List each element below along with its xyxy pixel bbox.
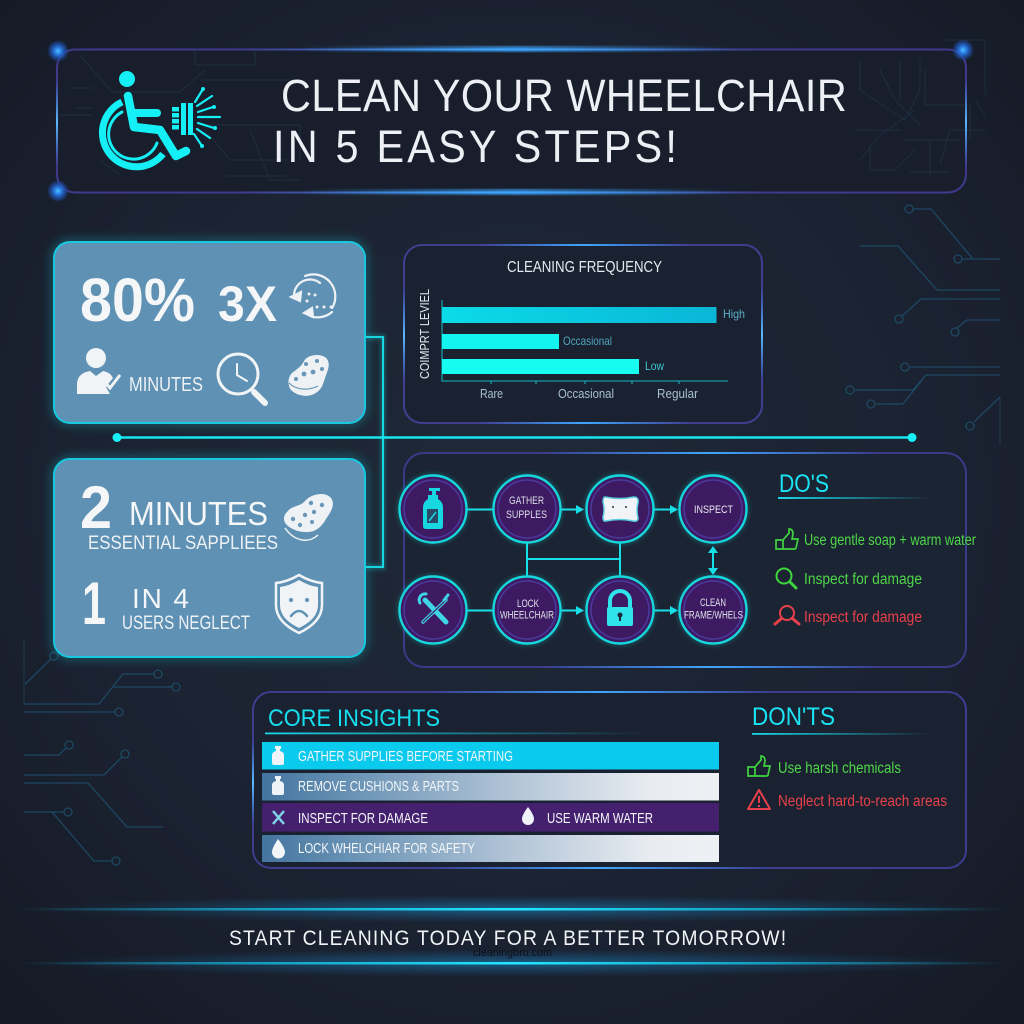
label: users neglect: USERS NEGLECT [122, 613, 250, 634]
heading: do's: DO'S [779, 470, 829, 498]
icon: wrench and screwdriver [419, 594, 448, 622]
do's list [775, 529, 976, 626]
stat: 1 in 4: 1 [82, 570, 106, 637]
insight bar 3 [262, 803, 719, 832]
icon: sponge [284, 494, 333, 540]
insight bar 1: GATHER SUPPLIES BEFORE STARTING [298, 749, 513, 765]
stat: 1 in 4 [82, 570, 189, 637]
step label: lock wheelchair: WHEELCHAIR [500, 610, 554, 622]
bar chart: Regular [657, 386, 699, 401]
panel: cleaning frequency chart [403, 244, 763, 424]
label: essential supplies: ESSENTIAL SAPPLIEES [88, 533, 278, 554]
icon: red magnifier [775, 606, 799, 624]
do: inspect: Inspect for damage [804, 571, 922, 588]
icon: sponge [288, 355, 329, 396]
panel: stats card bottom [54, 459, 365, 657]
icon: soap bottle [423, 488, 443, 529]
insight bar 3: INSPECT FOR DAMAGE [298, 811, 428, 827]
icon: refresh with particles [291, 274, 335, 317]
stat: 3X: 3X [218, 276, 277, 332]
panel: core insights [252, 691, 966, 869]
don'ts list [748, 756, 947, 810]
icon: green thumbs up [748, 756, 770, 776]
stat: 1 in 4: IN 4 [132, 583, 189, 614]
flow step circles [399, 475, 747, 644]
do: gentle soap: Use gentle soap + warm water [804, 532, 976, 549]
step label: inspect: INSPECT [694, 504, 733, 516]
icon: person with check [77, 348, 120, 394]
bar chart: Rare [480, 386, 503, 401]
icon: padlock [607, 591, 633, 626]
title: IN 5 EASY STEPS! [273, 122, 677, 172]
insight bar 1 [262, 742, 719, 770]
do: inspect red: Inspect for damage [804, 609, 922, 626]
icon: sad shield [276, 575, 322, 633]
step label: lock wheelchair: LOCK [517, 598, 539, 610]
icon: thumbs up [776, 529, 798, 549]
panel: stats card top [54, 242, 365, 423]
chart title: CLEANING FREQUENCY [507, 259, 662, 276]
bar chart [442, 300, 745, 401]
title [273, 71, 847, 172]
y axis label: COIMPRT LEVIEL [418, 289, 432, 379]
panel: process flow and do's [404, 452, 966, 668]
bar chart: Occasional [558, 386, 614, 401]
step label: gather supplies: SUPPLES [506, 509, 547, 521]
flow connectors and arrows [467, 505, 718, 615]
heading: don'ts: DON'TS [752, 703, 835, 731]
insight bar 4: LOCK WHELCHIAR FOR SAFETY [298, 841, 475, 857]
bar chart: High [723, 307, 745, 321]
icon: clock magnifier [218, 354, 265, 403]
glowing corner nodes [47, 39, 974, 202]
insight bar 2: REMOVE CUSHIONS & PARTS [298, 779, 459, 795]
step label: gather supplies: GATHER [509, 495, 544, 507]
stat: 80%: 80% [80, 266, 195, 334]
step label: gather supplies [506, 495, 547, 521]
heading: core insights: CORE INSIGHTS [268, 705, 440, 732]
watermark: cleaningbro.com [473, 947, 552, 959]
icon: warning triangle [748, 790, 770, 809]
footer glow lines [20, 895, 1004, 977]
connector lines [112, 337, 916, 567]
stat: 2 minutes: 2 [80, 474, 112, 541]
step label: clean frame/wheels [684, 597, 743, 622]
header panel [56, 40, 985, 194]
bar chart: Occasional [563, 334, 612, 348]
label: minutes: MINUTES [129, 374, 203, 396]
insight bar 4 [262, 835, 719, 862]
footer call to action: START CLEANING TODAY FOR A BETTER TOMORROW! [229, 926, 786, 950]
title: CLEAN YOUR WHEELCHAIR [281, 71, 847, 121]
icon: cushion [603, 497, 638, 521]
step label: clean frame/wheels: CLEAN [700, 597, 726, 609]
step label: lock wheelchair [500, 598, 554, 622]
icon: wheelchair with brush [102, 71, 220, 167]
insight bar 2 [262, 773, 719, 800]
icon: green magnifier [776, 568, 796, 588]
bar chart: Low [645, 359, 664, 373]
stat: 2 minutes [80, 474, 268, 541]
step label: clean frame/wheels: FRAME/WHELS [684, 610, 743, 622]
stat: 2 minutes: MINUTES [129, 495, 268, 532]
insight bar 3: USE WARM WATER [547, 811, 653, 827]
don't: harsh chemicals: Use harsh chemicals [778, 760, 901, 777]
don't: neglect areas: Neglect hard-to-reach areas [778, 793, 947, 810]
